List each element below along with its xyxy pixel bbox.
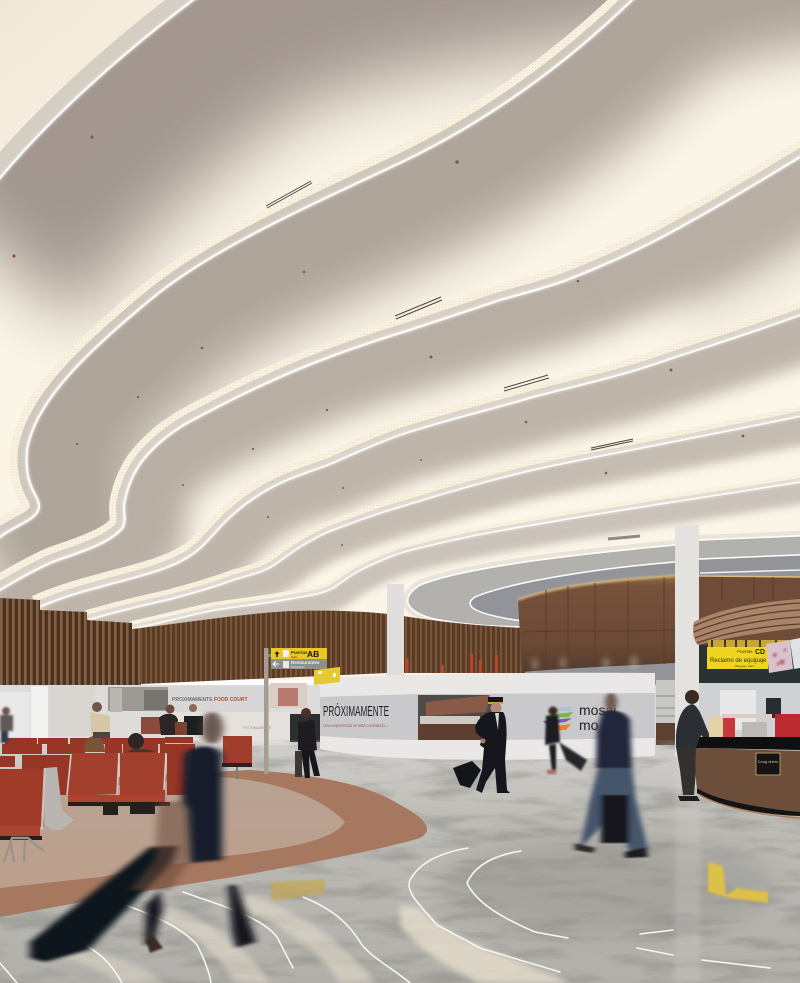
back wall left <box>0 683 322 749</box>
food court hoarding text: PROXIMAMENTE FOOD COURT <box>172 697 248 703</box>
standing group <box>159 704 203 735</box>
column right <box>675 525 699 757</box>
yellow sign: baggage claim: Reclamo de equipaje <box>710 658 767 664</box>
back area right of hoarding <box>655 645 800 760</box>
ceiling fixtures <box>12 135 744 546</box>
left wood slat wall <box>0 598 141 686</box>
floor light lines <box>0 848 770 983</box>
ceiling band 3 <box>0 140 800 600</box>
seating rows <box>0 736 252 862</box>
seated man <box>128 733 156 752</box>
seated woman <box>84 736 105 752</box>
yellow sign: gates: AB <box>307 649 319 659</box>
wood floor area <box>0 770 427 917</box>
ceiling band 6 <box>130 474 800 629</box>
wayfinding sign post <box>264 648 327 774</box>
pilot with luggage <box>453 697 510 793</box>
back wall left: PROXIMAMENTE <box>243 726 272 730</box>
yellow sign: baggage claim <box>707 647 768 669</box>
hoarding logo: mosai <box>579 702 616 718</box>
hoarding logo: mo <box>579 717 599 733</box>
sign reflections on floor <box>270 862 768 903</box>
ceiling band 2 <box>0 0 800 572</box>
walker's luggage <box>30 846 178 962</box>
curved wood drum <box>518 576 675 672</box>
white curved hoarding <box>320 673 655 760</box>
distant passenger <box>0 707 13 743</box>
yellow sign: gates <box>271 648 327 659</box>
yellow sign: baggage claim: CD <box>755 649 765 656</box>
counter plaque: Cong chero <box>758 759 779 764</box>
info counter <box>695 698 800 818</box>
man in cream shirt <box>90 702 110 738</box>
grey sign: restaurants: Restaurantes <box>291 660 320 665</box>
man blurred, walking with suitcase <box>575 693 648 858</box>
air vents <box>266 181 640 539</box>
ceiling <box>0 0 800 700</box>
grey sign: restaurants: Restaurants <box>291 666 305 669</box>
ceiling oval ring <box>408 535 800 700</box>
grey sign: restaurants <box>271 659 327 669</box>
right wood slat wall <box>403 616 525 673</box>
man at counter <box>676 690 713 801</box>
centre wood slat wall <box>141 611 388 684</box>
hoarding logo <box>543 702 616 733</box>
yellow sign: baggage claim: Baggage claim <box>735 664 755 668</box>
foreground blurred walker <box>30 712 256 962</box>
ceiling band 5 <box>85 406 800 620</box>
woman with suitcase, blurred <box>545 706 587 774</box>
hoarding heading: PRÓXIMAMENTE <box>323 703 389 720</box>
ceiling band 4 <box>32 302 800 620</box>
floor light reflections <box>50 895 570 983</box>
hoarding image <box>418 695 500 740</box>
counter canopy <box>693 599 800 648</box>
ceiling band 1 <box>0 0 608 352</box>
seated and standing passengers <box>0 690 713 801</box>
woman near sign <box>295 708 320 778</box>
wood wall right of column <box>699 576 800 645</box>
marble floor <box>0 745 800 983</box>
hanging screens <box>766 638 800 673</box>
counter display and products <box>709 698 800 738</box>
hoarding subtitle: Una experiencia se está cocinando... <box>323 723 388 728</box>
column left <box>387 584 404 676</box>
yellow sign: gates: Gates <box>291 656 298 659</box>
distant yellow sign <box>314 667 340 685</box>
yellow sign: baggage claim: Puertas <box>737 649 753 654</box>
yellow sign: gates: Puertas <box>291 650 308 655</box>
